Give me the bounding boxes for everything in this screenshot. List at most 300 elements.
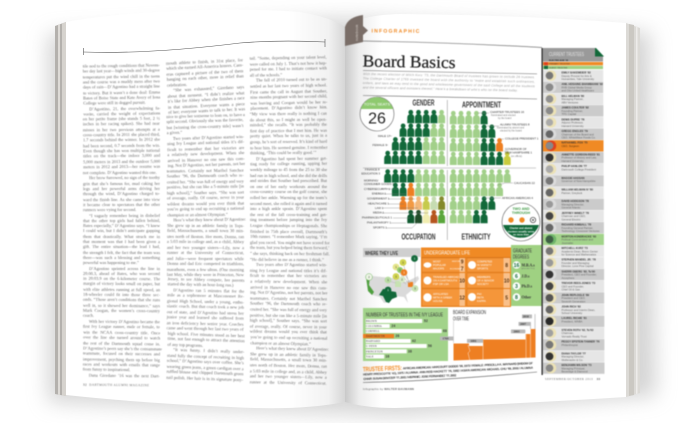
chart: gender pictogram — [384, 110, 445, 164]
trustee names and titles: President, CEO and Founder, — [562, 273, 597, 277]
header wave rule — [363, 41, 542, 48]
gender labels: FEMALE 9 — [372, 143, 387, 147]
state markers: 1 — [395, 274, 397, 278]
article column 2 — [166, 57, 246, 382]
left page article text: time, not fast enough to attract the attention — [167, 336, 245, 344]
left page article text: split second. Obviously she was the favorite, — [166, 118, 244, 125]
year flags: 2007 — [520, 322, 526, 326]
trustee names and titles: CEO, WhiteWave Foods Co. — [562, 136, 596, 140]
trustee names and titles: JAMES COULTER ’82 — [562, 106, 589, 110]
left page article text: Souther ’96, the Dartmouth coach who re- — [167, 173, 244, 179]
trustee names and titles: General Atlantic — [562, 206, 581, 210]
callout: two and through: THROUGH — [512, 211, 530, 215]
stat cell: senior society: MEMBERS — [477, 275, 491, 279]
left page footer: 32 DARTMOUTH ALUMNI MAGAZINE — [83, 382, 149, 387]
stat cell: greek house — [422, 289, 465, 306]
trustee firsts: HENRY PRESCOTTE ’41), 1975 / ALUMNA: ANN REID HACKETT ’76, 1982 / ASIAN AMERICAN: MICHAEL CHU ’68, 2000 / ALUMNA — [363, 366, 534, 376]
trustee names and titles: GREGG ENGLES ’79 — [562, 129, 588, 133]
left page article text: placement. D’Agostino didn’t know him. — [250, 105, 327, 111]
trustee names and titles: EMILY BAKEMEIER ’82 — [562, 70, 591, 74]
left page article text: Here’s what they knew about D’Agostino: — [173, 217, 246, 223]
trustee names and titles: STEPHEN MANDEL JR. ’78 — [562, 258, 596, 262]
chart: occupation pictogram — [384, 169, 445, 223]
sidebar: current trustees — [542, 48, 604, 375]
stat cell: greek house: AFFILIATED — [433, 292, 448, 296]
trustee firsts: TRUSTEE FIRSTS: — [363, 365, 402, 373]
trustee names and titles: Adjunct Professor, — [562, 121, 584, 125]
trustee names and titles: Founder and Managing — [562, 261, 590, 265]
left page article text: to victory. But it wasn’t a done deal: Emma — [83, 89, 160, 95]
trustee names and titles: Dartmouth College President — [562, 167, 596, 171]
occupation labels: CYBERSECURITY 1 — [364, 187, 391, 191]
left page — [66, 10, 345, 408]
left page article text: runners were vying for second. — [83, 207, 136, 212]
left page article text: grin that she’s famous for, mud caking her — [83, 180, 160, 185]
left page article text: First came the call in August that Souther, — [250, 88, 327, 94]
left page article text: a 5:03 mile in college and, as a child, Abbey — [250, 368, 327, 374]
trustee names and titles: TREVOR REES-JONES ’73 — [562, 281, 596, 285]
left page article text: with elite athletes running at full speed, an — [83, 287, 160, 292]
stat cell: phi beta kappa: KAPPA — [477, 299, 486, 303]
trustee names and titles: PHILIP HANLON ’77 — [562, 164, 587, 168]
left page article text: group, he’s sort of reserved. It’s kind of hard — [250, 139, 327, 144]
left page article text: it’s like for Abbey when she finishes a race — [168, 95, 245, 104]
state markers — [366, 255, 418, 293]
state markers: 1 — [387, 288, 389, 292]
panel: where they live — [363, 248, 420, 303]
left page article text: first Ivy League runner, male or female, to — [83, 324, 160, 329]
ethnicity labels: CAUCASIAN 22 — [514, 181, 535, 185]
sidebar header: GUEST TRUSTEE — [549, 67, 568, 69]
sidebar header: PRIMARY TRUSTEE — [549, 63, 570, 66]
left page article text: had run in high school, and she did the drills — [250, 173, 327, 178]
left page article text: teammate, focused on their successes and — [83, 350, 160, 356]
stat cell: senior society — [467, 273, 510, 288]
occupation labels: HEALTHCARE 1 — [368, 201, 389, 205]
left page article text: finished in 75th place overall, Dartmouth’s — [250, 228, 327, 234]
chart: appointment pictogram — [450, 111, 511, 165]
left page article text: marathons, even a few ultras. (One morning — [167, 266, 244, 272]
left page article text: weekly mileage to 45 from the 25 to 30 she — [250, 167, 327, 172]
occupation labels: SPORTS 1 — [373, 225, 387, 229]
ethnicity labels: AFRICAN AMERICAN 4 — [502, 196, 533, 200]
left page article text: positive, but she ran like a 5-minute mile [in — [167, 184, 244, 190]
left page article text: “He did believe in me as a runner, I think.” — [250, 256, 324, 262]
appointment labels: by the board — [498, 117, 512, 120]
panel: number of trustees in the ivy league: 52 — [424, 319, 428, 323]
left page article text: and her two younger sisters—Lily, now a — [167, 244, 244, 250]
left page article text: settled as her last two years of high school. — [250, 82, 327, 89]
heading: ethnicity: ETHNICITY — [462, 232, 491, 242]
stat cell: traveled abroad: FSP OR LSA — [433, 282, 449, 286]
year flags: 2003 — [514, 330, 520, 334]
left page article text: celebration. — [167, 81, 187, 87]
left page article text: D’Agostino had spent her summer get- — [256, 155, 327, 161]
stat cell: phi beta kappa: BETA — [477, 296, 484, 300]
trustee names and titles: ANNETTE GORDON-REED ’81 — [562, 152, 600, 156]
left page article text: 5,000 meters in 2013 and the outdoor 5,000 — [83, 159, 160, 164]
stat cell: varsity sports: IN VARSITY — [477, 263, 492, 267]
occupation labels: FINANCE 8 — [365, 168, 380, 172]
left page article text: a relatively new development. When she — [250, 279, 327, 284]
left page article text: but [winning the cross-country title] wasn’t — [167, 123, 244, 130]
appointment labels: GOVERNOR OF — [505, 147, 527, 151]
left page article text: of average, really. Of course, never in your — [250, 323, 327, 329]
left page article text: high school],” Souther says. “She was sort — [167, 189, 244, 195]
left page article text: second meet, she rolled it again and it turned — [250, 201, 327, 206]
left page article text: the strength I felt, the fact that the team was — [83, 249, 160, 255]
left page article text: do about this, so I might as well be open- — [250, 116, 327, 122]
panel: graduate degrees: (plus one Tu’s) — [522, 268, 535, 270]
panel: graduate degrees: Other — [522, 296, 532, 300]
left page article text: League championships or Heptagonals. She — [250, 223, 327, 228]
trustee names and titles: CEO and Founder, — [562, 284, 584, 288]
callout: two and through: TWO AND — [512, 207, 530, 211]
left page article text: Souther ’96, the Dartmouth coach who re- — [250, 301, 327, 307]
trustee names and titles: Seventh Generation — [562, 299, 586, 303]
state markers: 1 — [403, 270, 405, 274]
notebook tab: notebook — [354, 25, 359, 41]
panel: number of trustees in the ivy league: YALE — [366, 356, 374, 359]
left page article text: misses in her two previous attempts at a — [83, 127, 160, 132]
left page article text: temperatures put the wind chill in the teens — [83, 73, 160, 79]
panel: number of trustees in the ivy league: 42 — [412, 339, 416, 343]
left page article text: ward the finish line. As she came into view — [83, 196, 160, 201]
left page article text: gift. The entire situation—the lead I had, — [83, 244, 160, 249]
trustee names and titles: President and CEO, — [562, 296, 586, 300]
trustee names and titles: JOHN RICH ’82 — [562, 304, 581, 308]
panel: number of trustees in the ivy league: NUMBER OF TRUSTEES IN THE IVY LEAGUE — [366, 312, 443, 318]
left page article text: the team, but you helped bring them forward,’ — [250, 245, 329, 251]
left page article text: you’re going to end up recruiting a national — [167, 206, 244, 212]
panel: graduate degrees: J.D.s — [522, 274, 530, 278]
left page article text: had been second, 0.7 seconds from the win. — [83, 143, 160, 148]
left page article text: arrived in Hanover no one saw this com- — [167, 156, 245, 163]
left page article text: Dana Giordano ’16 was the next Dart- — [89, 372, 160, 378]
callout: two and through — [502, 203, 540, 241]
left page article text: College were still in dogged pursuit. — [83, 100, 146, 106]
intro text: The College Charter of 1769 invested the board with the authority to “make and establish such ordinances, — [363, 76, 535, 84]
trustee names and titles: Philanthropist — [562, 343, 578, 347]
stat cell: phi beta kappa: PHI — [477, 292, 482, 296]
left page article text: over the line she turned around to watch — [83, 334, 160, 340]
left page article text: ruffled blouse and chipped Dartmouth green — [166, 369, 244, 377]
portraits — [546, 72, 554, 372]
left page article text: wearing green jeans, a green cardigan over a — [167, 364, 244, 371]
trustee names and titles: RVB Global Media Group — [562, 86, 592, 90]
appointment labels: Nominated by alumni and — [497, 126, 525, 130]
appointment labels: NEW HAMPSHIRE 1 — [505, 150, 533, 154]
left page article text: first day of practice that I met him. He was — [250, 127, 327, 133]
left page article text: of average, really. Of course, never in your — [167, 195, 244, 201]
appointment labels — [478, 110, 539, 158]
left page article text: cross-country title. In 2011 she placed third, — [83, 132, 160, 138]
left page article text: eras captured a picture of the two of them — [166, 68, 243, 76]
trustee names and titles: NATHANIEL FOX ’75 — [562, 141, 588, 145]
state markers: 1 — [395, 265, 397, 269]
occupation labels: GOVERNMENT 1 — [367, 196, 390, 200]
left page article text: The fall of 2010 turned out to be as un- — [256, 77, 327, 83]
stat cell: most popular majors: 7 — [461, 266, 464, 272]
left page article text: Two years after D’Agostino started win- — [173, 134, 244, 141]
left page article text: in that situation. Everyone wants a piece — [168, 101, 245, 109]
callout: two and through: Charter and alumni — [510, 227, 533, 230]
left page article text: siastic coach. But that coach took a new job — [167, 304, 244, 310]
left page article text: inches in her racing spikes). She had near — [83, 121, 160, 127]
gender labels — [372, 134, 392, 147]
left page article text: field, Massachusetts, a small town 30 min- — [250, 357, 327, 363]
trustee names and titles: BENJAMIN WILSON ’73 — [562, 363, 592, 367]
left page article text: hanging on each other, more in relief than — [167, 73, 244, 82]
left page article text: well in, so it showed her dominance,” says — [83, 303, 160, 308]
panel: graduate degrees: Ph.D.s — [522, 284, 533, 288]
left page article text: started the day with an hour-long run.) — [167, 282, 234, 288]
stat cell: senior society: 10 — [504, 278, 510, 284]
gender labels: MALE 17 — [378, 134, 391, 138]
trustee names and titles: School University — [562, 311, 583, 315]
left page article text: pretty quiet. When he talks to us, just in a — [250, 133, 327, 139]
left page article text: runner at the University of Connecticut. — [250, 379, 327, 385]
state markers: 1 — [402, 260, 404, 264]
left page article text: positive, but she ran like a 5-minute mile [in — [250, 312, 327, 318]
left page article text: 10th runner. “I remember Mark saying, ‘I’m — [250, 234, 327, 239]
left page article text: ning Ivy League and national titles it’s dif- — [250, 268, 327, 273]
trustee names and titles: DENIS DUPRE ’78 — [562, 117, 585, 121]
panel: number of trustees in the ivy league: 38 — [408, 350, 412, 354]
stat cell: phi beta kappa: 5 — [505, 296, 508, 302]
left page article text: rolled her ankle. Warming up for the team’s — [250, 195, 327, 200]
left page article text: stand fully the concept of recruiting in high — [167, 353, 244, 360]
trustee names and titles: Harvard University — [562, 159, 584, 163]
callout: two and through: trustees usually serve — [508, 230, 535, 233]
left page article text: Mark Coogan, the women’s cross-country — [83, 308, 160, 313]
left page article text: champion or an almost Olympian.” — [167, 211, 228, 217]
chart: board expansion over time: BOARD EXPANSION — [453, 310, 486, 316]
left page article text: Here’s what they knew about D’Agostino: — [256, 346, 329, 352]
trustee names and titles: DAVID HODGSON ’78 — [562, 199, 589, 203]
trustee names and titles: Wolfensohn & Co. — [562, 358, 583, 362]
stat cell: traveled abroad: 10 — [459, 278, 465, 284]
year flags: 1769 — [442, 337, 449, 341]
left page article text: glad you raced. You might not have scored for — [250, 240, 330, 245]
occupation labels — [362, 168, 428, 229]
left page article text: wildest dreams would you ever think that — [167, 200, 244, 206]
left page article text: powerful was happening to me.” — [83, 260, 139, 265]
trustee names and titles: Deputy Provost for Arts & — [562, 74, 592, 78]
year flags — [440, 314, 535, 343]
left page article text: about that moment. “I didn’t realize what — [167, 90, 244, 98]
state markers: 1 — [387, 278, 389, 282]
panel: graduate degrees — [511, 245, 542, 306]
left page article text: coach. — [83, 313, 94, 318]
trustee names and titles: for Science and Mathematics — [562, 252, 597, 256]
left page article text: and her two younger sisters—Lily, now a — [250, 373, 327, 380]
left page article text: champion or an almost Olympian.” — [250, 340, 311, 346]
intro text: With the recent election of Mitch Kurz ’73, the Dartmouth Board of trustees has grown to include 26 trustees. — [363, 72, 535, 79]
left page article text: and the course was a muddy mess after two — [83, 78, 160, 85]
state markers: 1 — [414, 256, 416, 260]
left page article text: “She was exhausted,” Giordano says — [173, 84, 244, 92]
left page article text: ber day last year—high winds and 30-degree — [83, 68, 160, 74]
panel: graduate degrees: GRADUATE — [513, 248, 532, 254]
trustee names and titles: ANIL HOSAING BHAMBHANI ’92 — [562, 82, 603, 86]
chart: ethnicity pictogram — [450, 169, 511, 223]
panel: graduate degrees: 3 — [515, 284, 518, 290]
sidebar header: CURRENT TRUSTEES — [549, 52, 584, 58]
left page article text: Even though she has won multiple national — [83, 148, 160, 154]
trustee names and titles: Chairman of the Board and — [562, 132, 594, 136]
left page article text: to hear him. He seemed genuine. I remember — [250, 144, 328, 150]
left page article text: junior year and learned she suffered from — [167, 315, 244, 321]
left page article text: through the wind, D’Agostino charged to- — [83, 191, 160, 196]
section label: infographic: INFOGRAPHIC — [371, 29, 421, 35]
left page article text: titles on the track—the indoor 3,000 and — [83, 153, 160, 159]
left page article text: them that drastically. What struck me in — [83, 233, 160, 239]
trustee names and titles: DIANA TAYLOR ’77 — [562, 351, 586, 355]
left page article text: races and workouts with emails that range — [83, 361, 160, 367]
year flags: 2010 — [523, 314, 529, 318]
sidebar header — [543, 48, 604, 69]
trustee names and titles: Chairman, — [562, 331, 574, 335]
left page article text: on one of her early workouts around the — [250, 184, 327, 189]
occupation labels: MORNING/ — [364, 178, 379, 182]
panel: number of trustees in the ivy league: 56 — [428, 344, 432, 348]
panel: undergraduate life: UNDERGRADUATE LIFE — [424, 250, 470, 256]
left page article text: Jersey, to see Abbey compete, her parents — [167, 277, 245, 283]
trustee firsts: CHAIR: SUSAN DENTZER ’77, 2001 / HISPANIC: JOSE FERNANDEZ ’77, 2002 — [363, 373, 457, 381]
trustee names and titles: MORTON KONDRACKE ’60 — [562, 234, 597, 238]
trustee names and titles: ABV Ventures — [562, 100, 579, 104]
stat cell: most popular majors: POPULAR — [433, 263, 446, 267]
trustee names and titles: SHERRI OBERG ’82, Tu’90 — [562, 269, 596, 273]
left page article text: cross-country course on the golf course, she — [250, 189, 327, 194]
left page article text: school,” D’Agostino says over coffee. She’s — [167, 358, 244, 366]
stat cell: traveled abroad — [422, 273, 465, 288]
left page article text: it became clear to spectators that the other — [83, 201, 160, 207]
left page article text: mouth athlete to finish, in 31st place, for — [166, 57, 243, 65]
row backgrounds — [543, 70, 604, 374]
badge: total seats 26 — [360, 97, 394, 131]
trustee names and titles: Journalist — [562, 241, 573, 245]
trustee rows — [543, 70, 604, 374]
left page article text: cruited her. “She was full of energy and very — [250, 307, 327, 312]
trustee firsts — [363, 360, 534, 381]
left page article text: on her petite frame (she stands 5 feet, 2 ½ — [83, 116, 160, 122]
trustee names and titles: Vornado Realty Trust — [562, 334, 587, 338]
stat cell: greek house: 12 — [459, 296, 465, 302]
trustee names and titles: CEO, Surgeon — [562, 144, 579, 148]
panel: graduate degrees: 8 — [515, 295, 518, 301]
stat cell: senior society: OF A SENIOR — [477, 278, 494, 282]
left page article text: were called on July 1. That’s not how it hap- — [250, 60, 327, 66]
trustee names and titles: TPG Capital — [562, 112, 577, 116]
left page article text: there—was such a blessing and something — [83, 255, 160, 260]
left page article text: high school],” Souther says. “She was sort — [250, 318, 327, 324]
stat cell: most popular majors: 9 — [461, 260, 464, 266]
left page article text: was leaving and Coogan would be her re- — [250, 99, 327, 105]
panel: graduate degrees: 16 — [514, 263, 519, 269]
trustee names and titles: Humanities, Yale University — [562, 77, 595, 81]
panel: number of trustees in the ivy league: 68 — [443, 329, 447, 333]
left page article text: minded,” she recalls. “It was probably the — [250, 122, 327, 128]
trustee names and titles: President, WNBA — [562, 320, 583, 324]
trustee names and titles: JOHN REPLOGLE ’89 — [562, 293, 589, 297]
callout: two and through: one term — [516, 237, 527, 240]
trustee names and titles: Director, Lone Pine Capital — [562, 264, 594, 268]
stat cell: most popular majors: MOST — [433, 260, 441, 264]
left page article text: that moment was that I had been given a — [83, 239, 160, 244]
stat cell: most popular majors: HISTORY — [452, 261, 462, 263]
panel: number of trustees in the ivy league: BROWN — [366, 320, 377, 323]
notebook tab — [345, 15, 368, 46]
trustee names and titles: MAGGIE HASSAN — [562, 176, 585, 180]
left page article text: wildest dreams would you ever think that — [250, 329, 327, 335]
left page edge stack — [55, 22, 66, 396]
left page article text: 1.7 seconds behind the winner. In 2012 she — [83, 137, 160, 143]
stat cell: varsity sports: SPORTS — [477, 266, 488, 270]
trustee names and titles: Founding Partner, — [562, 109, 583, 113]
panel: graduate degrees: 6 — [515, 274, 518, 280]
left page article text: came and went through her last two years of — [166, 326, 244, 332]
trustee names and titles — [562, 70, 603, 374]
left page article text: ” she says, thinking back on her freshman fall. — [250, 251, 330, 256]
left page article text: in 20:03.9 on the 6-kilometer course. The — [83, 276, 160, 281]
left page article text: the rest of the fall cross-training and get- — [250, 212, 327, 217]
left page article text: an iron deficiency her senior year. Coaches — [167, 320, 244, 327]
trustee names and titles: Technology Crossover Ventures — [562, 229, 600, 233]
state markers: 3 — [414, 286, 416, 290]
left page article text: cruited her. “She was full of energy and very — [167, 178, 244, 184]
panel: number of trustees in the ivy league: 26 — [396, 334, 399, 338]
panel: number of trustees in the ivy league: 24 — [392, 324, 395, 328]
left page article text: a 5:03 mile in college and, as a child, Abbey — [167, 239, 244, 244]
article column 3 — [249, 54, 330, 386]
stat cell: most popular majors: MAJORS — [433, 266, 444, 270]
left page article text: high school. Five minutes stood as her best — [168, 331, 245, 338]
ethnicity labels — [484, 181, 535, 200]
trustee names and titles: WILLIAM HELMAN IV ’80 — [562, 188, 594, 192]
trustee names and titles: Managing Principal, — [562, 366, 585, 370]
trustee names and titles: STEVEN ROTH ’62, Tu’63 — [562, 328, 594, 332]
left page article text: legs and her powerful arms driving her — [83, 185, 160, 191]
trustee names and titles: Academic Dean, Bronx Center — [562, 249, 598, 253]
left page article text: and strides that Souther had prescribed. But — [250, 178, 327, 183]
left page article text: thinking, ‘This could be really good.’” — [250, 150, 316, 155]
state markers: 2 — [368, 275, 370, 279]
left page article text: “I vaguely remember being in disbelief — [89, 212, 160, 217]
left page article text: nail polish. Her hair is in its signature pony- — [166, 375, 243, 382]
left page article text: Donna and dad Eric competed in triathlons, — [167, 261, 244, 266]
left page article text: meters in 2012 and 2013—her resume was — [83, 164, 160, 170]
appointment labels: CHARTER TRUSTEES 16 — [490, 110, 524, 114]
credit line: Infographic by WALTER BAUMANN — [363, 387, 414, 391]
left page article text: D’Agostino sprinted across the line in — [89, 265, 160, 271]
trustee names and titles: Managing Partner, — [562, 97, 584, 101]
left page article text: win the NCAA cross-country title. Once — [83, 329, 160, 335]
stat cell: phi beta kappa — [467, 289, 510, 306]
left page article text: “My view was there really is nothing I can — [250, 111, 327, 116]
us map — [366, 276, 419, 303]
stat cell: varsity sports: 8 — [505, 263, 508, 269]
trustee names and titles: Professor of History and Law, — [562, 156, 597, 160]
left page article text: teammates. Certainly not Maribel Sanchez — [250, 295, 327, 301]
left page article text: a relatively new development. When she — [167, 150, 244, 158]
heading: appointment: APPOINTMENT — [462, 100, 501, 110]
badge: total seats 26: TOTAL SEATS — [364, 102, 390, 106]
left page article text: “It was funny. I didn’t really under- — [173, 347, 244, 355]
bars — [366, 319, 442, 358]
portrait halos — [546, 70, 556, 373]
